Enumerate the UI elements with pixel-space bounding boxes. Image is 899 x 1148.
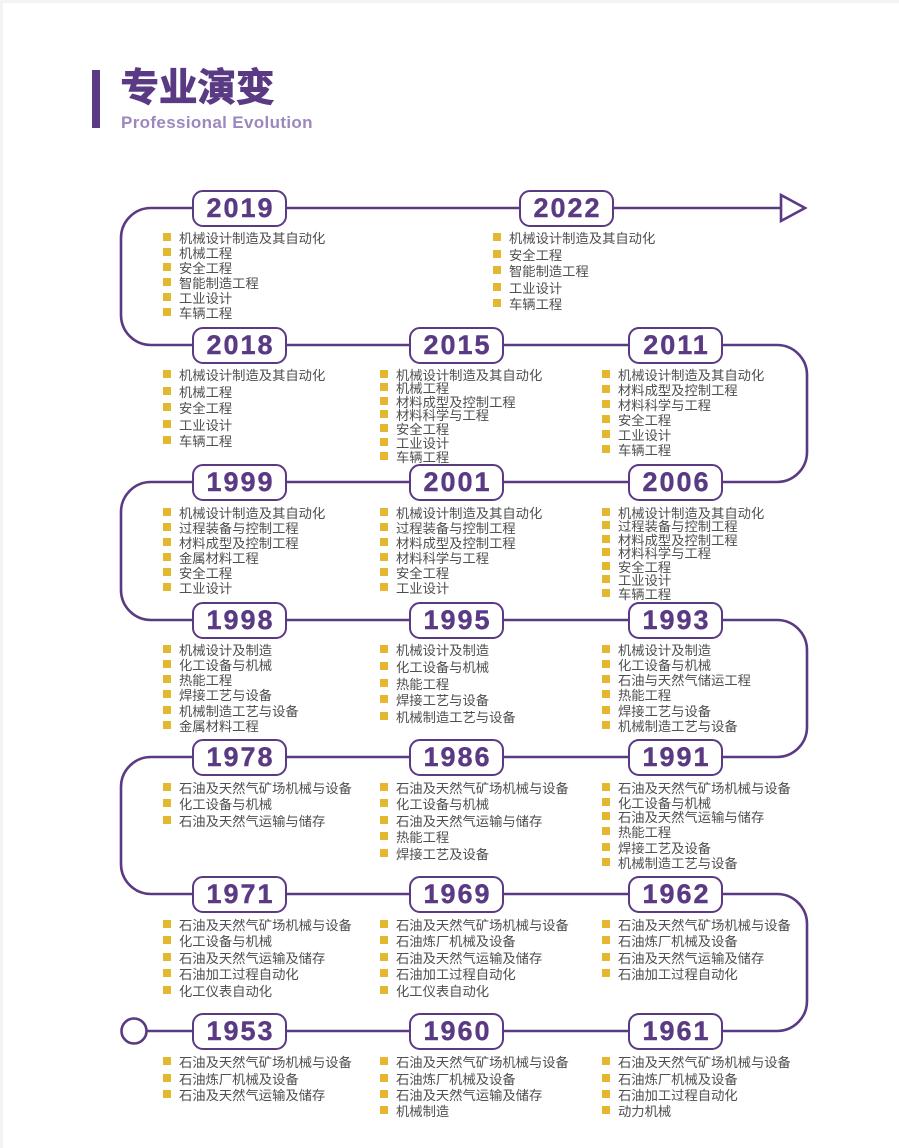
- major list: 2011: 工业设计: [618, 425, 671, 444]
- major list: 2006: 工业设计: [618, 570, 671, 589]
- major list: 1986: 热能工程: [396, 827, 449, 846]
- year badge: 2015: [409, 327, 504, 364]
- major list: 1999: 安全工程: [179, 563, 232, 582]
- major list: 2022: 机械设计制造及其自动化: [509, 228, 655, 247]
- panel: 2011: [602, 327, 764, 459]
- major list: 2018: 工业设计: [179, 415, 232, 434]
- major list: 1978: 化工设备与机械: [179, 794, 272, 813]
- major list: 1969: 石油炼厂机械及设备: [396, 931, 516, 950]
- major list: 2011: 安全工程: [618, 410, 671, 429]
- panel: 1962: [602, 876, 791, 983]
- major list: 2011: 材料成型及控制工程: [618, 380, 738, 399]
- title accent bar: [92, 70, 100, 128]
- year badge: 1971: [192, 876, 287, 913]
- year badge: 2006: [628, 464, 723, 501]
- major list: 2006: 材料成型及控制工程: [618, 530, 738, 549]
- major list: 1998: 化工设备与机械: [179, 655, 272, 674]
- major list: 2011: 机械设计制造及其自动化: [618, 365, 764, 384]
- major list: 1995: 化工设备与机械: [396, 657, 489, 676]
- year badge: 1993: [628, 602, 723, 639]
- year badge: 2018: 2018: [206, 330, 275, 360]
- major list: 1986: [380, 778, 569, 863]
- year badge: 1993: 1993: [642, 605, 711, 635]
- major list: 1999: [163, 503, 325, 597]
- major list: 2019: 机械设计制造及其自动化: [179, 228, 325, 247]
- major list: 2019: [163, 228, 325, 322]
- major list: 2006: 安全工程: [618, 557, 671, 576]
- year badge: 2001: [409, 464, 504, 501]
- major list: 1991: 机械制造工艺与设备: [618, 853, 738, 872]
- major list: 2006: [602, 503, 764, 603]
- major list: 1962: [602, 915, 791, 983]
- major list: 2001: 过程装备与控制工程: [396, 518, 516, 537]
- major list: 1953: 石油及天然气运输及储存: [179, 1085, 325, 1104]
- major list: 1961: [602, 1052, 791, 1120]
- major list: 1986: 石油及天然气运输与储存: [396, 811, 542, 830]
- title: 专业演变: [120, 67, 275, 110]
- major list: 2022: 安全工程: [509, 245, 562, 264]
- major list: 2015: 机械工程: [396, 378, 449, 397]
- year badge: 2015: 2015: [423, 330, 492, 360]
- major list: 1991: 焊接工艺及设备: [618, 838, 711, 857]
- major list: 1999: 工业设计: [179, 578, 232, 597]
- major list: 2018: 机械设计制造及其自动化: [179, 365, 325, 384]
- major list: 2018: 安全工程: [179, 398, 232, 417]
- major list: 1971: 化工仪表自动化: [179, 981, 272, 1000]
- major list: 1953: 石油及天然气矿场机械与设备: [179, 1052, 352, 1071]
- year badge: 2011: 2011: [643, 330, 710, 360]
- major list: 1960: 石油及天然气运输及储存: [396, 1085, 542, 1104]
- major list: 2018: [163, 365, 325, 450]
- panel: 2015: [380, 327, 542, 466]
- major list: 1995: [380, 640, 516, 726]
- major list: 1993: [602, 640, 751, 735]
- year badge: 2022: [519, 190, 614, 227]
- major list: 2018: 机械工程: [179, 382, 232, 401]
- major list: 1998: 金属材料工程: [179, 716, 259, 735]
- major list: 2019: 车辆工程: [179, 303, 232, 322]
- major list: 1995: 机械制造工艺与设备: [396, 707, 516, 726]
- major list: 2015: 工业设计: [396, 433, 449, 452]
- major list: 1991: 化工设备与机械: [618, 793, 711, 812]
- major list: 1971: 石油及天然气运输及储存: [179, 948, 325, 967]
- major list: 1960: 石油及天然气矿场机械与设备: [396, 1052, 569, 1071]
- major list: 1998: 热能工程: [179, 670, 232, 689]
- panel: 1960: [380, 1013, 569, 1120]
- major list: 2006: 材料科学与工程: [618, 543, 711, 562]
- major list: 1993: 化工设备与机械: [618, 655, 711, 674]
- year badge: 1999: 1999: [206, 467, 275, 497]
- major list: 1993: 热能工程: [618, 685, 671, 704]
- major list: 1962: 石油及天然气运输及储存: [618, 948, 764, 967]
- major list: 1993: 机械制造工艺与设备: [618, 716, 738, 735]
- major list: 1978: 石油及天然气矿场机械与设备: [179, 778, 352, 797]
- year badge: 2001: 2001: [423, 467, 492, 497]
- major list: 2019: 工业设计: [179, 288, 232, 307]
- major list: 1961: 动力机械: [618, 1101, 671, 1120]
- major list: 1969: 石油及天然气运输及储存: [396, 948, 542, 967]
- year badge: 2019: 2019: [206, 193, 275, 223]
- year badge: 1991: [628, 739, 723, 776]
- major list: 1999: 过程装备与控制工程: [179, 518, 299, 537]
- panel: 2022: [493, 190, 655, 313]
- year badge: 2018: [192, 327, 287, 364]
- major list: 1971: [163, 915, 352, 1000]
- major list: 2006: 过程装备与控制工程: [618, 516, 738, 535]
- major list: 2015: 机械设计制造及其自动化: [396, 365, 542, 384]
- major list: 1986: 焊接工艺及设备: [396, 844, 489, 863]
- panel: 1999: [163, 464, 325, 597]
- major list: 2001: 机械设计制造及其自动化: [396, 503, 542, 522]
- year badge: 2019: [192, 190, 287, 227]
- year badge: 1995: 1995: [423, 605, 492, 635]
- major list: 2011: 车辆工程: [618, 440, 671, 459]
- panel: 1971: [163, 876, 352, 1000]
- year badge: 1999: [192, 464, 287, 501]
- major list: 1978: [163, 778, 352, 830]
- major list: 1961: 石油炼厂机械及设备: [618, 1069, 738, 1088]
- panel: 2001: [380, 464, 542, 597]
- year badge: 1953: 1953: [206, 1016, 275, 1046]
- major list: 2015: 材料科学与工程: [396, 405, 489, 424]
- major list: 1961: 石油加工过程自动化: [618, 1085, 738, 1104]
- major list: 1993: 石油与天然气储运工程: [618, 670, 751, 689]
- year badge: 1998: 1998: [206, 605, 275, 635]
- major list: 1998: [163, 640, 299, 735]
- major list: 2006: 车辆工程: [618, 584, 671, 603]
- panel: 1991: [602, 739, 791, 872]
- panel: 1969: [380, 876, 569, 1000]
- year badge: 1953: [192, 1013, 287, 1050]
- major list: 1962: 石油及天然气矿场机械与设备: [618, 915, 791, 934]
- major list: 2011: [602, 365, 764, 459]
- major list: 1999: 材料成型及控制工程: [179, 533, 299, 552]
- major list: 1960: 机械制造: [396, 1101, 449, 1120]
- panel: 1961: [602, 1013, 791, 1120]
- major list: 1986: 化工设备与机械: [396, 794, 489, 813]
- year badge: 2022: 2022: [533, 193, 602, 223]
- major list: 1995: 热能工程: [396, 674, 449, 693]
- major list: 2022: [493, 228, 655, 313]
- year badge: 1986: 1986: [423, 742, 492, 772]
- major list: 1991: 石油及天然气矿场机械与设备: [618, 778, 791, 797]
- major list: 1995: 机械设计及制造: [396, 640, 489, 659]
- major list: 1993: 焊接工艺与设备: [618, 701, 711, 720]
- major list: 1969: 石油加工过程自动化: [396, 964, 516, 983]
- year badge: 1969: [409, 876, 504, 913]
- panel: 1998: [163, 602, 299, 735]
- major list: 2019: 机械工程: [179, 243, 232, 262]
- subtitle: Professional Evolution: [121, 113, 313, 132]
- major list: 1961: 石油及天然气矿场机械与设备: [618, 1052, 791, 1071]
- major list: 2019: 安全工程: [179, 258, 232, 277]
- major list: 1993: 机械设计及制造: [618, 640, 711, 659]
- panel: 1995: [380, 602, 516, 726]
- major list: 1998: 机械设计及制造: [179, 640, 272, 659]
- major list: 2015: [380, 365, 542, 466]
- major list: 2022: 工业设计: [509, 278, 562, 297]
- year badge: 1978: 1978: [206, 742, 275, 772]
- major list: 1998: 焊接工艺与设备: [179, 685, 272, 704]
- year badge: 2011: [628, 327, 723, 364]
- major list: 1953: 石油炼厂机械及设备: [179, 1069, 299, 1088]
- major list: 1991: 热能工程: [618, 822, 671, 841]
- major list: 1953: [163, 1052, 352, 1104]
- major list: 1962: 石油炼厂机械及设备: [618, 931, 738, 950]
- major list: 1991: [602, 778, 791, 872]
- year badge: 1995: [409, 602, 504, 639]
- major list: 2015: 材料成型及控制工程: [396, 392, 516, 411]
- major list: 2006: 机械设计制造及其自动化: [618, 503, 764, 522]
- major list: 1999: 金属材料工程: [179, 548, 259, 567]
- major list: 2015: 安全工程: [396, 419, 449, 438]
- major list: 2001: [380, 503, 542, 597]
- year badge: 1969: 1969: [423, 879, 492, 909]
- major list: 1986: 石油及天然气矿场机械与设备: [396, 778, 569, 797]
- year badge: 1960: [409, 1013, 504, 1050]
- major list: 2022: 智能制造工程: [509, 261, 589, 280]
- year badge: 1971: 1971: [206, 879, 275, 909]
- year badge: 1978: [192, 739, 287, 776]
- year badge: 1962: [628, 876, 723, 913]
- major list: 2001: 工业设计: [396, 578, 449, 597]
- panel: 1993: [602, 602, 751, 735]
- major list: 1969: [380, 915, 569, 1000]
- major list: 1962: 石油加工过程自动化: [618, 964, 738, 983]
- major list: 1960: 石油炼厂机械及设备: [396, 1069, 516, 1088]
- major list: 2022: 车辆工程: [509, 294, 562, 313]
- panel: 2019: [163, 190, 325, 322]
- panel: 2006: [602, 464, 764, 603]
- major list: 1999: 机械设计制造及其自动化: [179, 503, 325, 522]
- major list: 2019: 智能制造工程: [179, 273, 259, 292]
- panel: 1953: [163, 1013, 352, 1104]
- major list: 2001: 材料科学与工程: [396, 548, 489, 567]
- major list: 1991: 石油及天然气运输与储存: [618, 807, 764, 826]
- major list: 1971: 石油及天然气矿场机械与设备: [179, 915, 352, 934]
- major list: 1960: [380, 1052, 569, 1120]
- major list: 1978: 石油及天然气运输与储存: [179, 811, 325, 830]
- major list: 2001: 材料成型及控制工程: [396, 533, 516, 552]
- year badge: 1986: [409, 739, 504, 776]
- year badge: 2006: 2006: [642, 467, 711, 497]
- major list: 1969: 石油及天然气矿场机械与设备: [396, 915, 569, 934]
- year badge: 1991: 1991: [642, 742, 711, 772]
- major list: 1998: 机械制造工艺与设备: [179, 701, 299, 720]
- panel: 1986: [380, 739, 569, 863]
- major list: 2011: 材料科学与工程: [618, 395, 711, 414]
- major list: 1971: 石油加工过程自动化: [179, 964, 299, 983]
- major list: 1995: 焊接工艺与设备: [396, 690, 489, 709]
- year badge: 1960: 1960: [423, 1016, 492, 1046]
- major list: 1971: 化工设备与机械: [179, 931, 272, 950]
- year badge: 1961: 1961: [642, 1016, 711, 1046]
- year badge: 1961: [628, 1013, 723, 1050]
- year badge: 1962: 1962: [642, 879, 711, 909]
- major list: 2001: 安全工程: [396, 563, 449, 582]
- major list: 2015: 车辆工程: [396, 447, 449, 466]
- panel: 1978: [163, 739, 352, 830]
- panel: 2018: [163, 327, 325, 450]
- major list: 2018: 车辆工程: [179, 431, 232, 450]
- year badge: 1998: [192, 602, 287, 639]
- major list: 1969: 化工仪表自动化: [396, 981, 489, 1000]
